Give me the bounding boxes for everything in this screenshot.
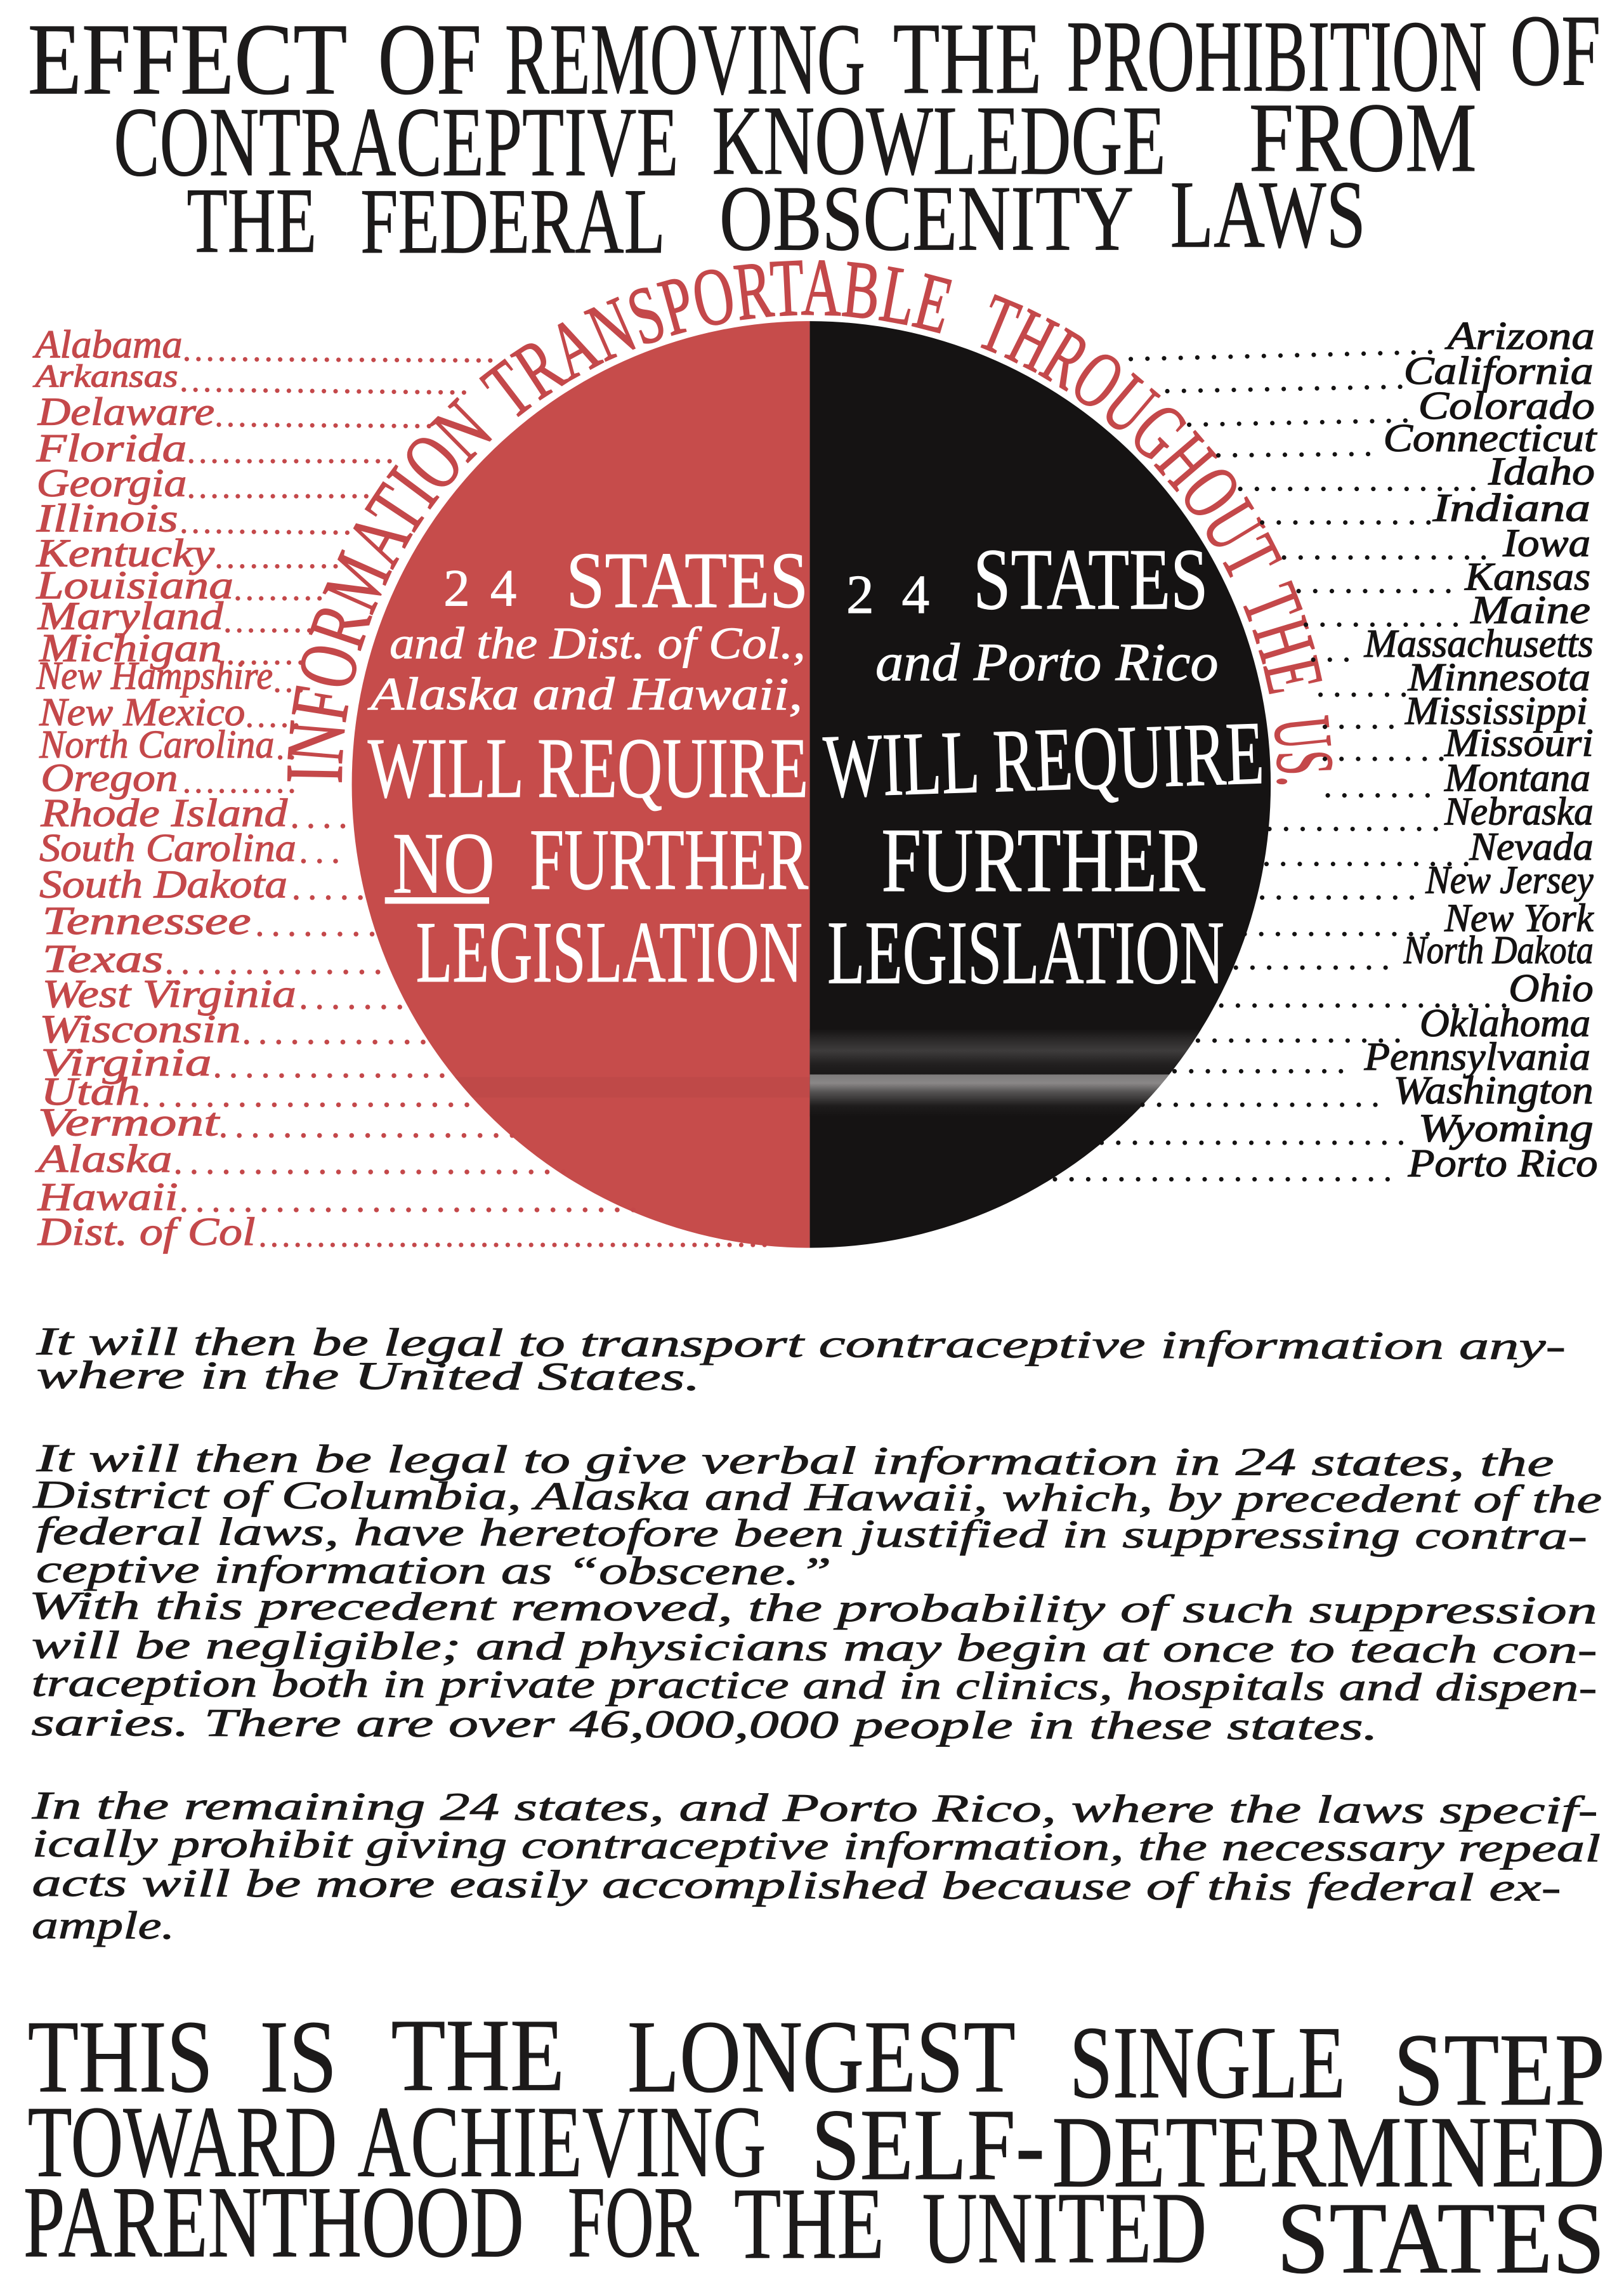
title: THE (893, 2, 1042, 115)
closing statement: ACHIEVING (358, 2086, 766, 2199)
title: OF (378, 3, 481, 115)
body text: paragraph two: will be negligible; and physicians may begin at once to teach con- (32, 1624, 1597, 1672)
state: Wyoming: Wyoming (1418, 1107, 1594, 1150)
title: THE (187, 169, 317, 272)
body text: paragraph two: District of Columbia, Alaska and Hawaii, which, by precedent of the (32, 1473, 1602, 1522)
state: Colorado (1189, 385, 1595, 428)
closing statement: FOR (568, 2166, 699, 2278)
state: Maryland: Maryland (37, 595, 224, 638)
state: Utah: Utah (41, 1070, 140, 1114)
state: New Jersey: New Jersey (1425, 859, 1594, 902)
state: Minnesota: Minnesota (1407, 656, 1590, 699)
title: REMOVING (505, 3, 865, 115)
state: Colorado: Colorado (1418, 385, 1595, 428)
arched heading: THE (1243, 580, 1322, 694)
state: Georgia: Georgia (37, 462, 187, 505)
right half label: LEGISLATION (827, 902, 1224, 1003)
closing statement: THIS (28, 1999, 213, 2114)
left half label: Alaska and Hawaii, (367, 667, 802, 720)
body text: paragraph three: In the remaining 24 states, and Porto Rico, where the laws specif- (31, 1784, 1598, 1832)
list: black states (1055, 315, 1598, 1185)
state: Indiana: Indiana (1432, 487, 1590, 530)
state: Kansas: Kansas (1464, 555, 1590, 598)
left half label: WILL REQUIRE (368, 721, 808, 816)
state: Alaska: Alaska (35, 1138, 172, 1181)
state: North Carolina: North Carolina (39, 723, 274, 766)
state: Pennsylvania: Pennsylvania (1364, 1036, 1590, 1079)
body text: paragraph one (36, 1320, 1566, 1402)
state: Massachusetts: Massachusetts (1364, 622, 1594, 666)
right half label: WILL REQUIRE (822, 702, 1266, 817)
closing statement: SELF- (811, 2088, 1045, 2201)
state: Oklahoma: Oklahoma (1420, 1002, 1590, 1045)
closing statement: TOWARD (28, 2086, 337, 2199)
right half label: and Porto Rico (875, 633, 1219, 692)
state: Louisiana: Louisiana (36, 564, 233, 607)
left half label: 24 (443, 559, 516, 617)
state: North Dakota: North Dakota (1403, 929, 1594, 972)
state: Ohio: Ohio (1509, 967, 1594, 1010)
state: Alabama: Alabama (32, 324, 183, 367)
body text: paragraph one: It will then be legal to transport contraceptive information any- (36, 1320, 1566, 1368)
right half label (822, 530, 1266, 1003)
right half label: 24 (846, 563, 929, 625)
closing statement: UNITED (922, 2171, 1207, 2284)
state: Connecticut: Connecticut (1383, 417, 1597, 460)
state: Tennessee: Tennessee (43, 900, 251, 943)
left half label: NO (393, 815, 495, 912)
body text: paragraph two: federal laws, have heretofore been justified in suppressing contra- (36, 1510, 1587, 1558)
body text: paragraph two: ceptive information as “obscene.” (36, 1548, 832, 1593)
closing statement: THE (391, 1998, 565, 2113)
title (28, 0, 1601, 273)
state: Florida: Florida (36, 427, 187, 470)
body text: paragraph three: ample. (32, 1904, 175, 1947)
closing statement: SINGLE (1070, 2005, 1346, 2120)
title: EFFECT (28, 3, 347, 115)
state: South Carolina: South Carolina (39, 827, 296, 870)
title: CONTRACEPTIVE (114, 87, 679, 197)
arched heading: INFORMATION (287, 397, 492, 782)
arched heading: US. (1274, 715, 1332, 784)
body text: paragraph one: where in the United States. (36, 1353, 700, 1399)
state: Delaware: Delaware (37, 390, 214, 433)
list: red states (32, 324, 773, 1254)
left half label: STATES (566, 536, 808, 625)
closing statement: LONGEST (627, 1999, 1016, 2114)
title: OBSCENITY (719, 166, 1134, 270)
state: Illinois: Illinois (36, 497, 178, 540)
state: Virginia: Virginia (41, 1041, 212, 1084)
arched heading: TRANSPORTABLE (479, 260, 952, 417)
state: Michigan: Michigan (39, 627, 222, 670)
state: Mississippi: Mississippi (1405, 690, 1587, 733)
state: Rhode Island: Rhode Island (40, 792, 288, 835)
state: Arizona: Arizona (1444, 315, 1595, 358)
body text: paragraph three: ically prohibit giving contraceptive information, the necessary repeal (32, 1822, 1601, 1871)
state: California: California (1404, 350, 1594, 393)
right half label: FURTHER (881, 810, 1205, 911)
body text: paragraph two: It will then be legal to give verbal information in 24 states, the (36, 1437, 1554, 1485)
title: FEDERAL (360, 169, 665, 273)
body text: paragraph two (29, 1437, 1602, 1749)
closing statement: PARENTHOOD (23, 2166, 524, 2278)
arched heading (287, 260, 1332, 784)
title: FROM (1249, 82, 1477, 192)
state: New York: New York (1444, 897, 1594, 940)
title: KNOWLEDGE (712, 86, 1166, 195)
left half label: and the Dist. of Col., (390, 618, 806, 668)
state: Nevada: Nevada (1469, 825, 1594, 869)
body text: paragraph two: traception both in private practice and in clinics, hospitals and dispen- (31, 1662, 1597, 1710)
left half label: FURTHER (530, 811, 808, 908)
closing statement: THE (734, 2167, 884, 2280)
state: Kentucky: Kentucky (36, 532, 215, 575)
state: California (1167, 350, 1594, 393)
paper crease on red half (336, 1077, 810, 1098)
body text: paragraph two: saries. There are over 46,000,000 people in these states. (31, 1701, 1378, 1749)
red half (352, 321, 810, 1248)
closing statement (23, 1998, 1605, 2288)
state: South Dakota: South Dakota (39, 864, 287, 907)
state: Dist. of Col: Dist. of Col (37, 1211, 256, 1254)
state: Arkansas (33, 358, 475, 394)
state: Nebraska: Nebraska (1444, 791, 1594, 834)
state: New Hampshire: New Hampshire (36, 655, 273, 698)
pie chart: red and black halves (336, 321, 1292, 1248)
body text: paragraph three (30, 1784, 1601, 1952)
state: Idaho: Idaho (1488, 450, 1595, 494)
state: Vermont: Vermont (38, 1101, 220, 1145)
state: Washington: Washington (1394, 1069, 1594, 1112)
state: New Mexico: New Mexico (39, 691, 245, 734)
state: Missouri: Missouri (1444, 722, 1594, 765)
state: Wisconsin: Wisconsin (39, 1008, 241, 1051)
body text: paragraph two: With this precedent removed, the probability of such suppression (29, 1584, 1597, 1633)
paper crease on black half (809, 1029, 1202, 1117)
state: Arkansas: Arkansas (33, 358, 178, 394)
state: Montana: Montana (1444, 757, 1590, 800)
state: Maine: Maine (1470, 589, 1590, 632)
body text: paragraph three: acts will be more easily accomplished because of this federal ex- (32, 1862, 1561, 1909)
state: Oregon: Oregon (41, 757, 178, 800)
title: LAWS (1170, 161, 1366, 268)
arched heading: THROUGHOUT (981, 294, 1283, 578)
state: Porto Rico: Porto Rico (1407, 1142, 1598, 1185)
closing statement: IS (259, 1999, 337, 2114)
left half label: LEGISLATION (416, 904, 802, 1001)
black half (810, 321, 1271, 1248)
state: West Virginia: West Virginia (43, 973, 296, 1016)
state: Hawaii: Hawaii (37, 1176, 178, 1219)
state: Arizona (1131, 315, 1595, 359)
left half label (367, 536, 808, 1001)
state: Iowa: Iowa (1502, 522, 1590, 565)
right half label: STATES (973, 530, 1208, 628)
state: Texas: Texas (43, 938, 164, 981)
